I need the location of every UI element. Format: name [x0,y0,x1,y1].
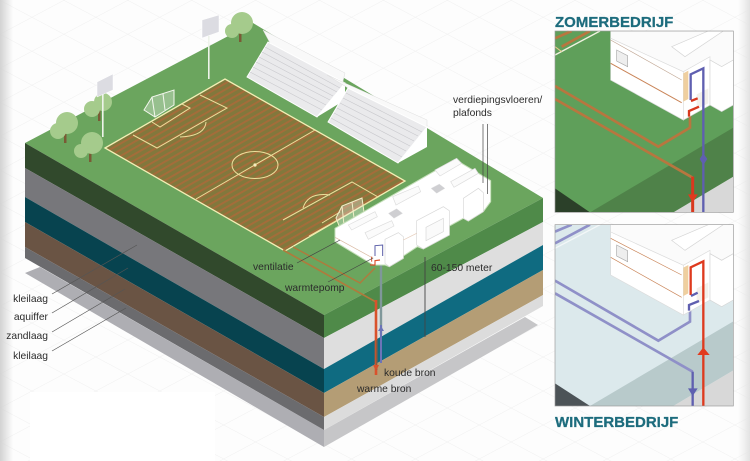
tree 1 [50,112,78,143]
building [335,158,491,267]
tree group left [50,12,253,162]
leader lines for building and depth [297,124,488,337]
heading: zomerbedrijf: ZOMERBEDRIJF [555,14,673,31]
goal right [336,198,364,228]
label: warme bron: warme bron [356,384,412,395]
underground and connection pipes [283,247,384,375]
goal left [144,90,174,117]
tribune 2 [327,75,427,163]
isometric soil block [25,23,543,430]
leader lines for soil layers [52,245,137,351]
tree 2 [74,132,103,162]
label: kleilaag top: kleilaag [13,294,48,305]
ground shadow [25,267,538,447]
floodlight 1 [202,15,219,79]
label: kleilaag bottom: kleilaag [13,351,48,362]
top grass surface [25,23,543,315]
panel: zomerbedrijf [555,31,733,212]
tree 3 [84,93,112,121]
label: aquiffer: aquiffer [14,312,49,323]
label: verdiepingsvloeren/plafonds: plafonds [453,108,492,119]
panel: winterbedrijf [555,225,733,406]
football field with heating pipes [105,79,405,251]
label: 60-150 meter: 60-150 meter [431,263,493,274]
label: verdiepingsvloeren/plafonds: verdiepingsvloeren/ [453,95,542,106]
floodlight 2 [97,74,113,137]
pitch markings [133,95,378,236]
left face layers [25,143,324,430]
label: koude bron: koude bron [384,368,436,379]
tree 4 [225,12,253,42]
label: warmtepomp: warmtepomp [284,283,345,294]
heading: winterbedrijf: WINTERBEDRIJF [555,414,678,431]
label: zandlaag: zandlaag [6,331,48,342]
right face layers [324,198,543,430]
tribune 1 [247,30,345,117]
label: ventilatie: ventilatie [253,262,294,273]
